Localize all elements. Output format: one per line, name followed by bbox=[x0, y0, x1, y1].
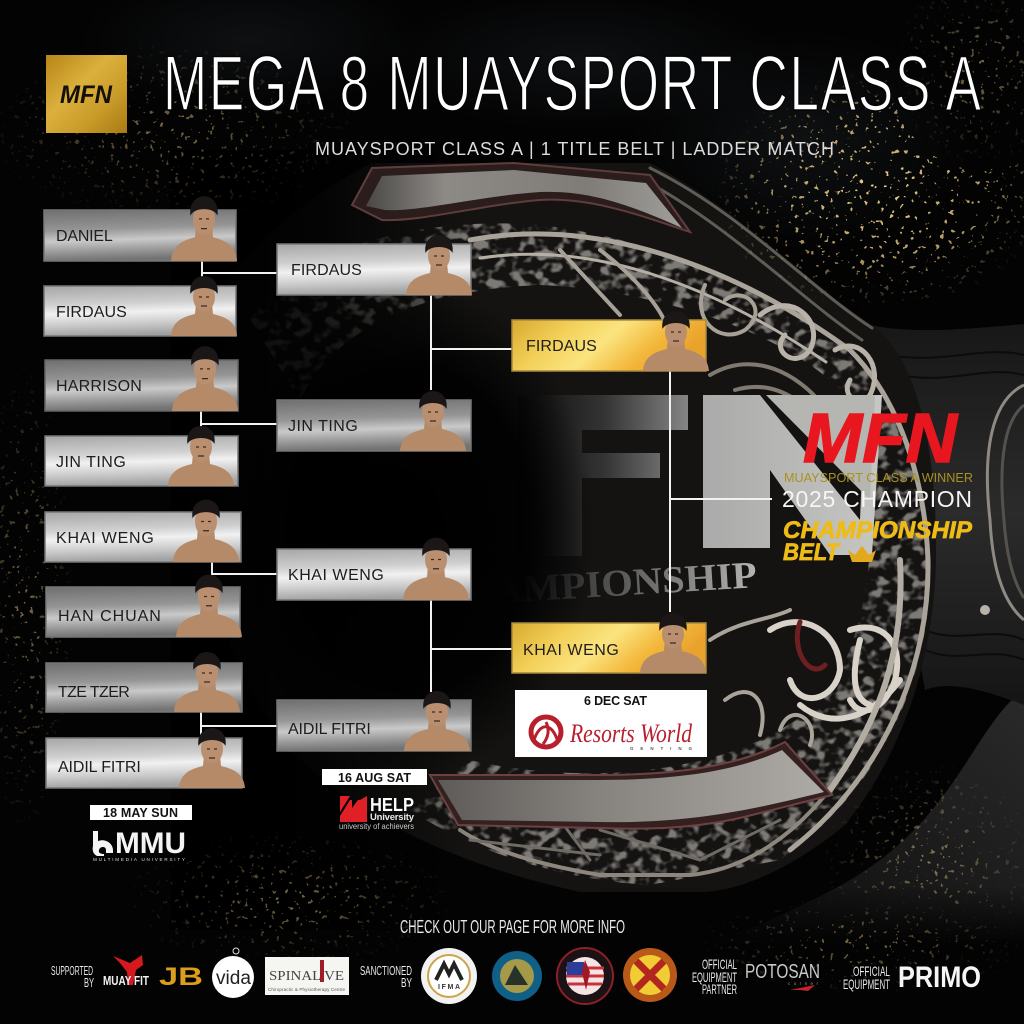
winner emblem bbox=[782, 399, 973, 566]
label: official equipment partner bbox=[692, 956, 737, 997]
belt letters M F N bbox=[335, 395, 882, 556]
belt bottom right strap bbox=[700, 690, 1024, 945]
name: Jin Ting: JIN TING bbox=[288, 418, 358, 435]
photo: Han Chuan bbox=[176, 575, 242, 637]
date tag and logo: Multimedia University: 18 MAY SUN bbox=[103, 806, 178, 820]
fighter card: Khai Weng bbox=[45, 500, 241, 562]
label: official equipment: OFFICIAL bbox=[853, 963, 890, 979]
photo: Aidil Fitri bbox=[404, 691, 470, 751]
photo: Harrison bbox=[172, 346, 238, 411]
name: Harrison: HARRISON bbox=[56, 378, 142, 395]
logo: Muay Fit bbox=[103, 955, 149, 988]
logo: IFMA bbox=[421, 948, 477, 1004]
bracket connector lines bbox=[201, 261, 772, 738]
logo: HELP University: university of achievers bbox=[339, 822, 414, 831]
logo: MFN red: MFN bbox=[803, 399, 958, 477]
label: winner line: MUAYSPORT CLASS A WINNER bbox=[784, 470, 973, 485]
logo: Persatuan Muaythai Malaysia bbox=[557, 948, 613, 1004]
belt top nameplate bbox=[352, 163, 690, 232]
fighter card: Jin Ting bbox=[277, 391, 471, 451]
photo: Tze Tzer bbox=[174, 652, 240, 712]
logo: IFMA: IFMA bbox=[438, 984, 460, 991]
fighter card: Jin Ting bbox=[45, 426, 238, 486]
logo: Spinalive: Chiropractic & Physiotherapy Centre bbox=[268, 987, 345, 992]
date tag and logo: HELP University bbox=[322, 769, 427, 831]
photo: Firdaus bbox=[171, 276, 237, 336]
logo: Potosan Corner: POTOSAN bbox=[745, 961, 820, 983]
label: supported by: BY bbox=[84, 975, 94, 990]
belt bottom nameplate bbox=[430, 742, 832, 829]
name: Khai Weng: KHAI WENG bbox=[56, 530, 154, 547]
logo: MFN gold badge: MFN bbox=[60, 81, 113, 109]
photo: Khai Weng bbox=[640, 613, 706, 673]
belt engraved word: CHAMPIONSHIP bbox=[431, 554, 758, 616]
fighter card: Tze Tzer bbox=[46, 652, 242, 712]
logo: Resorts World Genting bbox=[531, 717, 693, 751]
fighter card: Aidil Fitri bbox=[277, 691, 471, 751]
label: supported by: SUPPORTED bbox=[51, 963, 93, 978]
panel: finalists bbox=[512, 311, 709, 673]
name: Daniel: DANIEL bbox=[56, 228, 113, 245]
name: Firdaus: FIRDAUS bbox=[526, 338, 597, 355]
logo: Resorts World Genting: Resorts World bbox=[569, 719, 693, 748]
name: Jin Ting: JIN TING bbox=[56, 454, 126, 471]
name: Khai Weng: KHAI WENG bbox=[523, 642, 619, 659]
logo: MFN gold badge bbox=[46, 55, 127, 133]
panel: round one bracket bbox=[44, 196, 245, 788]
logo: Resorts World Genting: GENTING bbox=[630, 746, 692, 751]
photo: Firdaus bbox=[643, 311, 709, 371]
photo: Khai Weng bbox=[173, 500, 239, 562]
label: sanctioned by bbox=[360, 963, 412, 990]
logo: World Muay Thai Council bbox=[492, 951, 542, 1001]
venue: 6 Dec Resorts World bbox=[515, 690, 707, 757]
label: official equipment: EQUIPMENT bbox=[843, 976, 890, 992]
label: official equipment partner: OFFICIAL bbox=[702, 956, 737, 972]
label: official equipment partner: PARTNER bbox=[702, 981, 737, 997]
name: Firdaus: FIRDAUS bbox=[56, 304, 127, 321]
name: Tze Tzer: TZE TZER bbox=[58, 684, 130, 701]
logo: HELP University: HELP bbox=[370, 795, 414, 815]
name: Firdaus: FIRDAUS bbox=[291, 262, 362, 279]
subtitle: MUAYSPORT CLASS A | 1 TITLE BELT | LADDER MATCH bbox=[315, 139, 834, 159]
photo: Firdaus bbox=[406, 235, 472, 295]
logo: Muay Fit: MUAY FIT bbox=[103, 973, 149, 988]
photo: Khai Weng bbox=[403, 538, 469, 600]
label: official equipment bbox=[843, 963, 890, 992]
date tag and logo: Multimedia University bbox=[90, 805, 192, 862]
panel: round two bracket bbox=[277, 235, 472, 751]
belt right strap bbox=[860, 322, 1024, 705]
label: championship belt bbox=[783, 517, 973, 566]
label: championship belt: BELT bbox=[783, 539, 841, 566]
call to action: CHECK OUT OUR PAGE FOR MORE INFO bbox=[400, 917, 625, 937]
date: 6 Dec Sat: 6 DEC SAT bbox=[584, 694, 647, 708]
fighter card: Khai Weng bbox=[277, 538, 471, 600]
logo: Vida: vida bbox=[216, 968, 251, 989]
photo: Jin Ting bbox=[168, 426, 234, 486]
label: championship belt: CHAMPIONSHIP bbox=[783, 517, 973, 544]
logo: Primo: PRIMO bbox=[898, 961, 981, 994]
name: Khai Weng: KHAI WENG bbox=[288, 567, 384, 584]
fighter card: Firdaus bbox=[44, 276, 237, 336]
name: Aidil Fitri: AIDIL FITRI bbox=[58, 759, 141, 776]
label: supported by bbox=[51, 963, 94, 990]
bottom fade bbox=[600, 885, 1024, 945]
title: MEGA 8 MUAYSPORT CLASS A bbox=[163, 41, 981, 128]
championship belt illustration bbox=[252, 162, 1024, 926]
logo: Spinalive: SPINAL VE bbox=[269, 969, 344, 984]
fighter card: Aidil Fitri bbox=[46, 728, 245, 788]
fighter card: Han Chuan bbox=[46, 575, 242, 637]
label: sanctioned by: BY bbox=[401, 975, 412, 990]
logo: MMU: MULTIMEDIA UNIVERSITY bbox=[93, 857, 185, 862]
name: Han Chuan: HAN CHUAN bbox=[58, 608, 161, 625]
fighter card: Harrison bbox=[45, 346, 238, 411]
belt ornament swirls bbox=[460, 168, 928, 875]
left fade bbox=[170, 150, 595, 930]
logo: HELP University bbox=[339, 795, 415, 831]
fighter card: Daniel bbox=[44, 196, 237, 261]
fighter card: Firdaus bbox=[277, 235, 472, 295]
logo: HELP University: University bbox=[370, 812, 415, 823]
logo: Vida bbox=[212, 948, 254, 998]
logo: MMU: MMU bbox=[115, 827, 186, 860]
photo: Daniel bbox=[171, 196, 237, 261]
icon: crown bbox=[848, 546, 876, 562]
label: 2025 champion: 2025 CHAMPION bbox=[782, 486, 972, 512]
belt main plate bbox=[179, 163, 936, 892]
sponsors strip bbox=[51, 948, 981, 1004]
finalist card: Firdaus bbox=[512, 311, 709, 371]
belt engraved ornament bbox=[252, 223, 928, 884]
label: sanctioned by: SANCTIONED bbox=[360, 963, 412, 978]
photo: Aidil Fitri bbox=[179, 728, 245, 788]
logo: Potosan Corner bbox=[745, 961, 820, 991]
logo: Spinalive bbox=[265, 957, 349, 995]
name: Aidil Fitri: AIDIL FITRI bbox=[288, 721, 371, 738]
logo: JB: JB bbox=[159, 963, 203, 991]
date tag and logo: HELP University: 16 AUG SAT bbox=[338, 771, 411, 785]
logo: Persatuan Muaythai Selangor bbox=[623, 948, 677, 1002]
finalist card: Khai Weng bbox=[512, 613, 706, 673]
logo: Potosan Corner: corner bbox=[788, 981, 818, 986]
photo: Jin Ting bbox=[400, 391, 466, 451]
label: official equipment partner: EQUIPMENT bbox=[692, 969, 737, 985]
